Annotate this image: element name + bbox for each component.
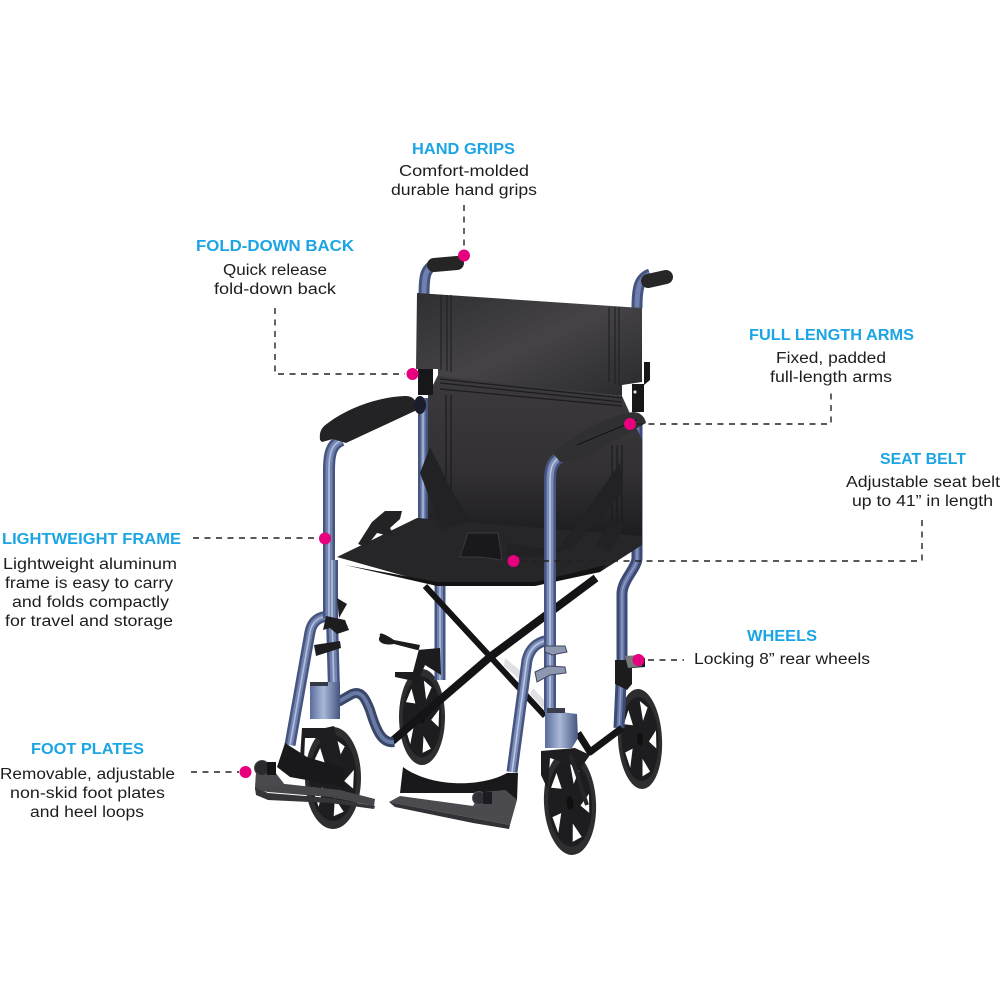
callout: hand grips: Comfort-molded (399, 163, 529, 180)
marker: wheels (632, 654, 644, 666)
callout: fold-down back (196, 238, 355, 298)
rear tubes (423, 264, 650, 728)
marker: lightweight frame (319, 532, 331, 544)
callout: foot plates (0, 741, 175, 821)
rear left wheel (399, 669, 445, 765)
leader line: lightweight frame (193, 537, 319, 539)
stitch lines lower (440, 375, 622, 535)
callout: seat belt (846, 451, 1000, 510)
callout: wheels: Locking 8” rear wheels (694, 651, 870, 668)
hand grip left (434, 263, 457, 265)
right foot plate (389, 790, 517, 825)
callout: foot plates: non-skid foot plates (10, 785, 165, 802)
marker: hand grips (458, 250, 470, 262)
upper back upholstery (416, 293, 642, 396)
callout: full length arms: full-length arms (770, 369, 892, 386)
right rear clamp (615, 656, 645, 690)
wheelchair illustration (254, 263, 666, 856)
callout: lightweight frame: and folds compactly (12, 594, 169, 611)
back hinge right (632, 362, 650, 412)
X-frame (390, 578, 622, 752)
callout: wheels (694, 628, 870, 668)
serial label (504, 658, 546, 708)
marker: full length arms (624, 418, 636, 430)
left front post and leg tube (290, 440, 342, 745)
left armrest (320, 396, 417, 443)
leader line: fold-down back (275, 308, 405, 374)
callout: lightweight frame: Lightweight aluminum (3, 556, 177, 573)
callout: full length arms: Fixed, padded (776, 350, 886, 367)
right foot plate knob (472, 792, 492, 804)
right clamps (535, 646, 567, 682)
right foot plate edge (389, 802, 510, 829)
right heel loop (400, 767, 518, 800)
upper stitching (441, 295, 619, 385)
callout: seat belt: SEAT BELT (880, 451, 967, 468)
callout: wheels: WHEELS (747, 628, 817, 645)
callout: seat belt: Adjustable seat belt (846, 474, 1000, 491)
callout: lightweight frame (2, 531, 181, 630)
right socket (545, 710, 578, 748)
callout: fold-down back: Quick release (223, 262, 327, 279)
left front wheel (305, 727, 361, 829)
left caster fork (300, 726, 342, 786)
right caster fork (541, 748, 590, 790)
callout: foot plates: and heel loops (30, 804, 144, 821)
lower back upholstery (428, 375, 642, 537)
callout: hand grips: HAND GRIPS (412, 141, 515, 158)
seat belt straps (420, 447, 624, 557)
left foot plate (255, 772, 375, 809)
callout: full length arms: FULL LENGTH ARMS (749, 327, 914, 344)
front right wheel (541, 750, 599, 856)
callout: seat belt: up to 41” in length (852, 493, 993, 510)
leader line: seat belt (520, 520, 922, 561)
callout: lightweight frame: for travel and storage (5, 613, 173, 630)
armrest joint (414, 396, 426, 414)
rear foot stop (379, 633, 441, 682)
left clamps (314, 598, 349, 656)
leader line: wheels (648, 659, 684, 661)
curved frame bar (338, 693, 394, 742)
leader line: hand grips (463, 205, 465, 250)
rear right wheel (615, 688, 665, 790)
front right post and leg tube (512, 457, 560, 772)
leader line: foot plates (191, 771, 239, 773)
callout: lightweight frame: LIGHTWEIGHT FRAME (2, 531, 181, 548)
right armrest (553, 412, 646, 462)
callout: fold-down back: fold-down back (214, 281, 336, 298)
callout: hand grips: durable hand grips (391, 182, 537, 199)
hand grip right (648, 277, 666, 281)
left foot plate knob (254, 760, 276, 776)
callout: foot plates: FOOT PLATES (31, 741, 144, 758)
callout: full length arms (749, 327, 914, 386)
marker: foot plates (240, 766, 252, 778)
marker: fold-down back (406, 368, 418, 380)
back hinge left (418, 369, 433, 395)
bracket left on seat (358, 511, 402, 547)
callout: hand grips (391, 141, 537, 199)
callout: fold-down back: FOLD-DOWN BACK (196, 238, 355, 255)
left socket (310, 682, 340, 719)
seat belt buckle (460, 533, 502, 560)
callout: lightweight frame: frame is easy to carry (5, 575, 173, 592)
left heel loop (277, 743, 345, 787)
seat front edge (345, 565, 606, 586)
callout: foot plates: Removable, adjustable (0, 766, 175, 783)
marker: seat belt (508, 555, 520, 567)
leader line: full length arms (637, 392, 831, 424)
seat (337, 518, 642, 585)
